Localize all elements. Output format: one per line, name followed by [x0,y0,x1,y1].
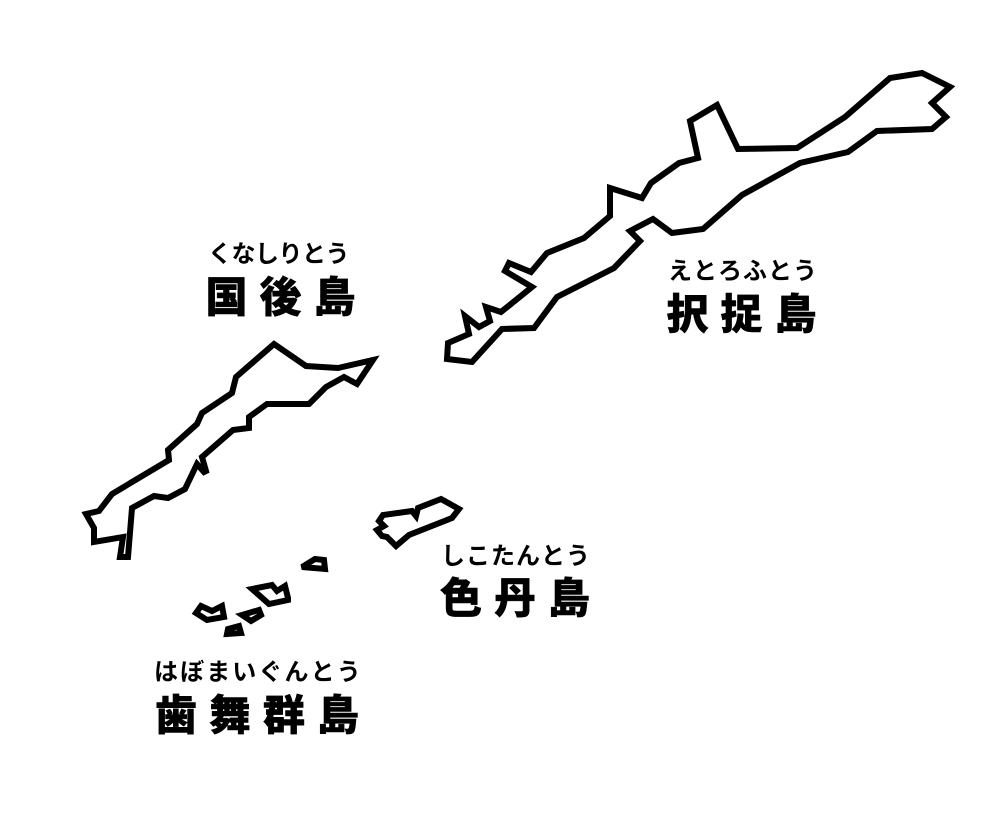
label: Etorofu [666,258,829,338]
reading: Etorofu: えとろふとう [668,258,818,285]
name: Habomai: 歯舞群島 [155,692,371,739]
label: Shikotan [440,543,602,622]
reading: Kunashiri: くなしりとう [208,241,349,268]
label: Habomai [154,659,371,739]
islet: small south [227,626,241,634]
reading: Shikotan: しこたんとう [441,543,591,570]
label: Kunashiri [206,241,368,321]
island outline: Etorofu [447,73,950,362]
name: Shikotan: 色丹島 [440,575,602,622]
name: Kunashiri: 国後島 [206,274,368,321]
islet: middle [242,610,261,621]
islet: Shibotsu [252,585,288,604]
islet: northeast [302,559,325,569]
reading: Habomai: はぼまいぐんとう [154,659,363,686]
islet: Taraku [196,606,224,620]
island outline: Shikotan [377,499,459,546]
island outline: Kunashiri [86,344,373,557]
name: Etorofu: 択捉島 [666,291,829,338]
island group: Habomai [196,559,325,634]
